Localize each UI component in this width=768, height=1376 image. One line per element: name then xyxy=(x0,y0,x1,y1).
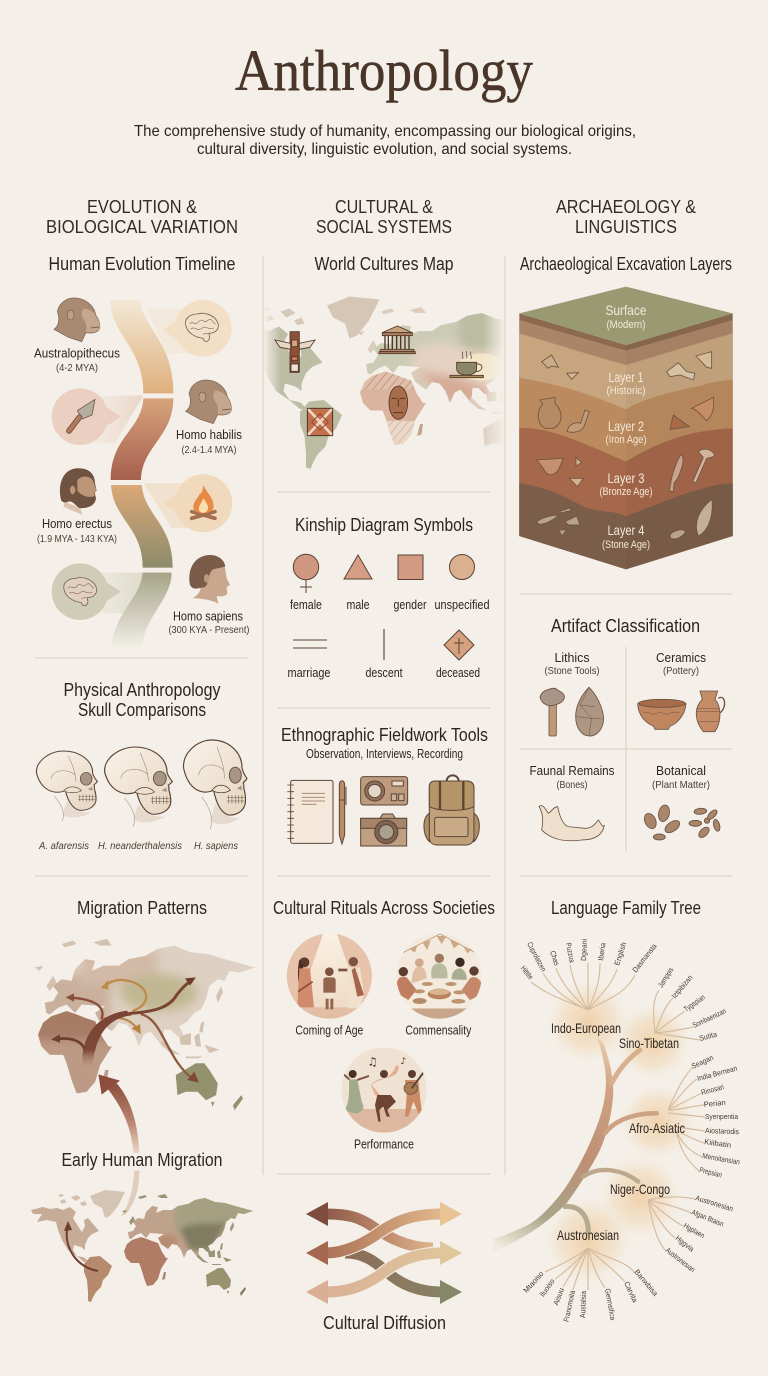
language leaves: Dasmansta xyxy=(630,941,659,974)
column heading: cultural xyxy=(316,196,452,237)
skull labels: H. sapiens xyxy=(194,840,239,852)
callout: brain 1 xyxy=(163,300,232,357)
callout: stone tool xyxy=(52,388,121,445)
column heading: evolution: BIOLOGICAL VARIATION xyxy=(46,216,238,237)
icon: totem pole xyxy=(275,332,315,372)
panel: rituals xyxy=(283,933,483,1151)
icon: Homo sapiens head xyxy=(189,555,230,604)
column heading: cultural: SOCIAL SYSTEMS xyxy=(316,216,452,237)
label: cultural diffusion: Cultural Diffusion xyxy=(323,1313,446,1333)
panel: fieldwork tools xyxy=(287,775,479,846)
icon: recorder xyxy=(361,777,408,805)
language leaves: Gennsifica xyxy=(603,1288,618,1322)
symbol: deceased xyxy=(444,630,474,660)
language leaves: Hittite xyxy=(519,964,535,981)
timeline band xyxy=(110,300,173,650)
language leaves: Afgan Btaisn xyxy=(690,1208,725,1229)
title: Anthropology xyxy=(235,38,533,103)
label: Australopithecus: (4-2 MYA) xyxy=(56,363,98,374)
language leaves: Iberia xyxy=(596,941,608,961)
column heading: evolution xyxy=(46,196,238,237)
heading: fieldwork tools: Observation, Interviews, Recording xyxy=(306,747,463,761)
language leaves: Francmoita xyxy=(561,1289,577,1323)
icon: seeds xyxy=(642,804,721,840)
skull labels: A. afarensis xyxy=(38,840,90,852)
language leaves: Seagan xyxy=(690,1053,715,1071)
family labels: Indo-European xyxy=(551,1020,621,1036)
family labels: Afro-Asiatic xyxy=(629,1120,685,1136)
ritual: commensality xyxy=(396,933,483,1022)
icon: Homo erectus head xyxy=(60,468,97,515)
language leaves: Rinosari xyxy=(700,1082,725,1097)
label: botanical xyxy=(652,764,710,791)
panel: skull comparison xyxy=(36,740,247,852)
icon: jug xyxy=(696,691,725,732)
kinship labels row 2: deceased xyxy=(436,666,480,680)
symbol: female xyxy=(293,554,319,593)
layer labels: (Bronze Age) xyxy=(599,486,652,498)
family labels: Niger-Congo xyxy=(610,1181,670,1197)
symbol: descent xyxy=(383,629,385,660)
chart: language family tree xyxy=(493,938,741,1323)
language leaves: Austalsia xyxy=(578,1290,588,1318)
kinship labels row 2 xyxy=(288,666,480,680)
language leaves: Carvita xyxy=(622,1280,640,1304)
label: early human migration: Early Human Migration xyxy=(62,1150,222,1170)
label: ceramics xyxy=(656,651,706,677)
language leaves: Sombaenizan xyxy=(691,1006,727,1030)
icon: jaw bone xyxy=(539,806,604,841)
music notes xyxy=(368,1054,406,1068)
surface top xyxy=(519,287,733,345)
symbol: unspecified xyxy=(450,554,474,580)
language leaves: India Bernean xyxy=(696,1064,738,1083)
layer labels: (Stone Age) xyxy=(602,539,650,551)
skull: H. neanderthalensis xyxy=(105,747,172,826)
language leaves: Prepsian xyxy=(699,1165,723,1180)
heading: kinship symbols: Kinship Diagram Symbols xyxy=(295,515,473,535)
soil block xyxy=(519,313,733,569)
language leaves xyxy=(519,938,741,1323)
label: Homo erectus: Homo erectus xyxy=(42,517,112,531)
arrow: top-left xyxy=(306,1202,433,1248)
language leaves: Austronesian xyxy=(664,1245,697,1274)
language leaves: Cuprolatzen xyxy=(525,940,548,973)
kinship labels row 2: marriage xyxy=(288,666,331,680)
label: Homo habilis: (2.4-1.4 MYA) xyxy=(181,445,236,456)
label: Australopithecus xyxy=(34,346,120,374)
layer labels: (Historic) xyxy=(606,385,645,397)
language leaves: Iztpibizan xyxy=(670,973,695,1000)
kinship labels row 1: gender xyxy=(394,598,426,612)
map: migration routes xyxy=(31,939,255,1110)
language leaves: Iluoiso xyxy=(538,1277,557,1299)
symbol: marriage xyxy=(293,640,327,648)
language leaves: Menoitansian xyxy=(702,1151,741,1167)
tree trunk and branches xyxy=(493,1037,657,1252)
icon: temple xyxy=(379,326,415,354)
column heading: archaeology: ARCHAEOLOGY & xyxy=(556,196,697,217)
symbol: male xyxy=(344,555,372,579)
icon: rug xyxy=(307,408,333,436)
language leaves: Aisuu xyxy=(551,1287,566,1307)
label: Homo habilis xyxy=(176,428,242,456)
heading: human evolution timeline: Human Evolution Timeline xyxy=(48,254,236,274)
family labels: Sino-Tibetan xyxy=(619,1035,679,1051)
heading: cultural rituals: Cultural Rituals Across Societies xyxy=(273,898,495,918)
language leaves: English xyxy=(612,941,628,967)
chart: cultural diffusion arrows xyxy=(306,1202,462,1304)
label: Homo sapiens: (300 KYA - Present) xyxy=(168,625,249,636)
language leaves: Puzzua xyxy=(564,942,577,964)
label: Homo erectus: (1.9 MYA - 143 KYA) xyxy=(37,534,117,545)
subtitle xyxy=(134,123,636,158)
map: early world xyxy=(31,1190,265,1302)
label: faunal remains: Faunal Remains xyxy=(530,764,614,778)
label: Homo sapiens: Homo sapiens xyxy=(173,609,243,623)
label: faunal remains: (Bones) xyxy=(556,779,588,791)
family glows xyxy=(542,978,697,1286)
leaf branches xyxy=(531,963,705,1290)
skull labels xyxy=(38,840,239,852)
language leaves: Mtaoiso xyxy=(521,1269,545,1295)
symbol: gender xyxy=(398,555,423,580)
column heading: cultural: CULTURAL & xyxy=(335,196,434,217)
skull: A. afarensis xyxy=(36,751,97,821)
label: faunal remains xyxy=(530,764,614,791)
icon: backpack xyxy=(424,775,479,845)
label: Australopithecus: Australopithecus xyxy=(34,346,120,360)
subtitle: The comprehensive study of humanity, encompassing our biological origins, xyxy=(134,123,636,140)
music notes: ♪ xyxy=(400,1056,406,1067)
icon: stone hammer xyxy=(540,688,564,736)
column heading: evolution: EVOLUTION & xyxy=(87,196,198,217)
label: botanical: (Plant Matter) xyxy=(652,779,710,791)
language leaves: Chas xyxy=(548,950,562,967)
family labels: Austronesian xyxy=(557,1227,619,1243)
language leaves: Hggvia xyxy=(674,1233,696,1254)
column heading: archaeology: LINGUISTICS xyxy=(575,216,677,237)
language leaves: Austronesian xyxy=(694,1193,734,1213)
language leaves: Dgeani xyxy=(579,938,589,961)
label: coming of age: Coming of Age xyxy=(295,1023,363,1037)
ritual: performance xyxy=(340,1047,428,1134)
label: lithics: Lithics xyxy=(554,651,590,665)
language leaves: Hgplaen xyxy=(682,1221,706,1240)
callout: fire xyxy=(163,474,232,532)
icon: notebook xyxy=(287,780,333,843)
icon: Australopithecus head xyxy=(54,298,100,342)
label: performance: Performance xyxy=(354,1137,414,1151)
heading: skull comparisons xyxy=(64,680,220,720)
language leaves: Aiostarodis xyxy=(705,1126,739,1136)
heading: skull comparisons: Skull Comparisons xyxy=(78,700,206,720)
layer labels: (Iron Age) xyxy=(605,434,646,446)
heading: world cultures map: World Cultures Map xyxy=(314,254,454,274)
music notes: ♫ xyxy=(368,1054,378,1068)
icon: mask xyxy=(389,386,408,419)
culture icons xyxy=(275,326,483,436)
layer labels: Layer 2 xyxy=(608,418,644,434)
label: lithics xyxy=(544,651,600,677)
map: world cultures xyxy=(265,296,502,469)
language leaves: Tygspian xyxy=(682,993,707,1014)
kinship labels row 2: descent xyxy=(366,666,403,680)
layer labels: Layer 1 xyxy=(608,369,644,385)
skull: H. sapiens xyxy=(184,740,247,829)
icon: camera xyxy=(361,814,407,846)
icon: Homo habilis head xyxy=(186,380,231,424)
arrow: bottom-right xyxy=(345,1253,462,1304)
language leaves: Sutita xyxy=(698,1029,719,1043)
kinship labels row 1: female xyxy=(290,598,322,612)
callout washes xyxy=(83,308,200,613)
arrow: bottom-left xyxy=(306,1241,462,1304)
label: botanical: Botanical xyxy=(656,764,706,778)
language leaves: Syenpentia xyxy=(705,1112,739,1121)
layer labels: Layer 3 xyxy=(607,470,645,486)
panel: evolution timeline xyxy=(34,298,249,650)
label: ceramics: (Pottery) xyxy=(663,665,699,677)
family labels xyxy=(551,1020,685,1243)
label: lithics: (Stone Tools) xyxy=(544,665,600,677)
heading: fieldwork tools xyxy=(281,725,488,761)
callout: brain 2 xyxy=(52,563,121,620)
language leaves: Kiiibatin xyxy=(704,1137,732,1150)
label: commensality: Commensality xyxy=(405,1023,472,1037)
icon: hand axe xyxy=(576,687,604,736)
icon: bowl xyxy=(638,699,686,729)
icon: coffee cup xyxy=(450,351,483,378)
layer labels: Surface xyxy=(605,302,647,318)
skull labels: H. neanderthalensis xyxy=(98,840,183,852)
dividers xyxy=(35,256,732,1175)
heading: language family tree: Language Family Tree xyxy=(551,898,701,918)
layer labels: (Modern) xyxy=(606,319,645,331)
label: Homo sapiens xyxy=(168,609,249,636)
buried artifacts xyxy=(537,352,714,539)
ritual: coming of age xyxy=(286,934,372,1019)
kinship labels row 1: male xyxy=(346,598,370,612)
label: Homo habilis: Homo habilis xyxy=(176,428,242,442)
panel: artifact classification xyxy=(520,647,732,851)
heading: artifact classification: Artifact Classification xyxy=(551,616,700,636)
label: ceramics: Ceramics xyxy=(656,651,706,665)
subtitle: cultural diversity, linguistic evolution, and social systems. xyxy=(197,141,572,158)
language leaves: Banwbisa xyxy=(632,1268,660,1298)
arrow: top-right xyxy=(306,1202,462,1265)
kinship labels row 1: unspecified xyxy=(434,598,490,612)
kinship labels row 1 xyxy=(290,598,490,612)
panel: kinship symbols xyxy=(288,554,490,680)
heading: skull comparisons: Physical Anthropology xyxy=(64,680,220,700)
language leaves: Perian xyxy=(703,1098,726,1109)
label: Homo erectus xyxy=(37,517,117,545)
icon: pen xyxy=(339,781,346,844)
column heading: archaeology xyxy=(556,196,697,237)
language leaves: Jamppis xyxy=(656,965,675,989)
heading: migration patterns: Migration Patterns xyxy=(77,898,207,918)
migration arrows xyxy=(51,977,199,1216)
layer labels: Layer 4 xyxy=(607,522,645,538)
heading: fieldwork tools: Ethnographic Fieldwork Tools xyxy=(281,725,488,745)
chart: excavation layers xyxy=(519,287,733,569)
layer labels xyxy=(599,302,652,551)
